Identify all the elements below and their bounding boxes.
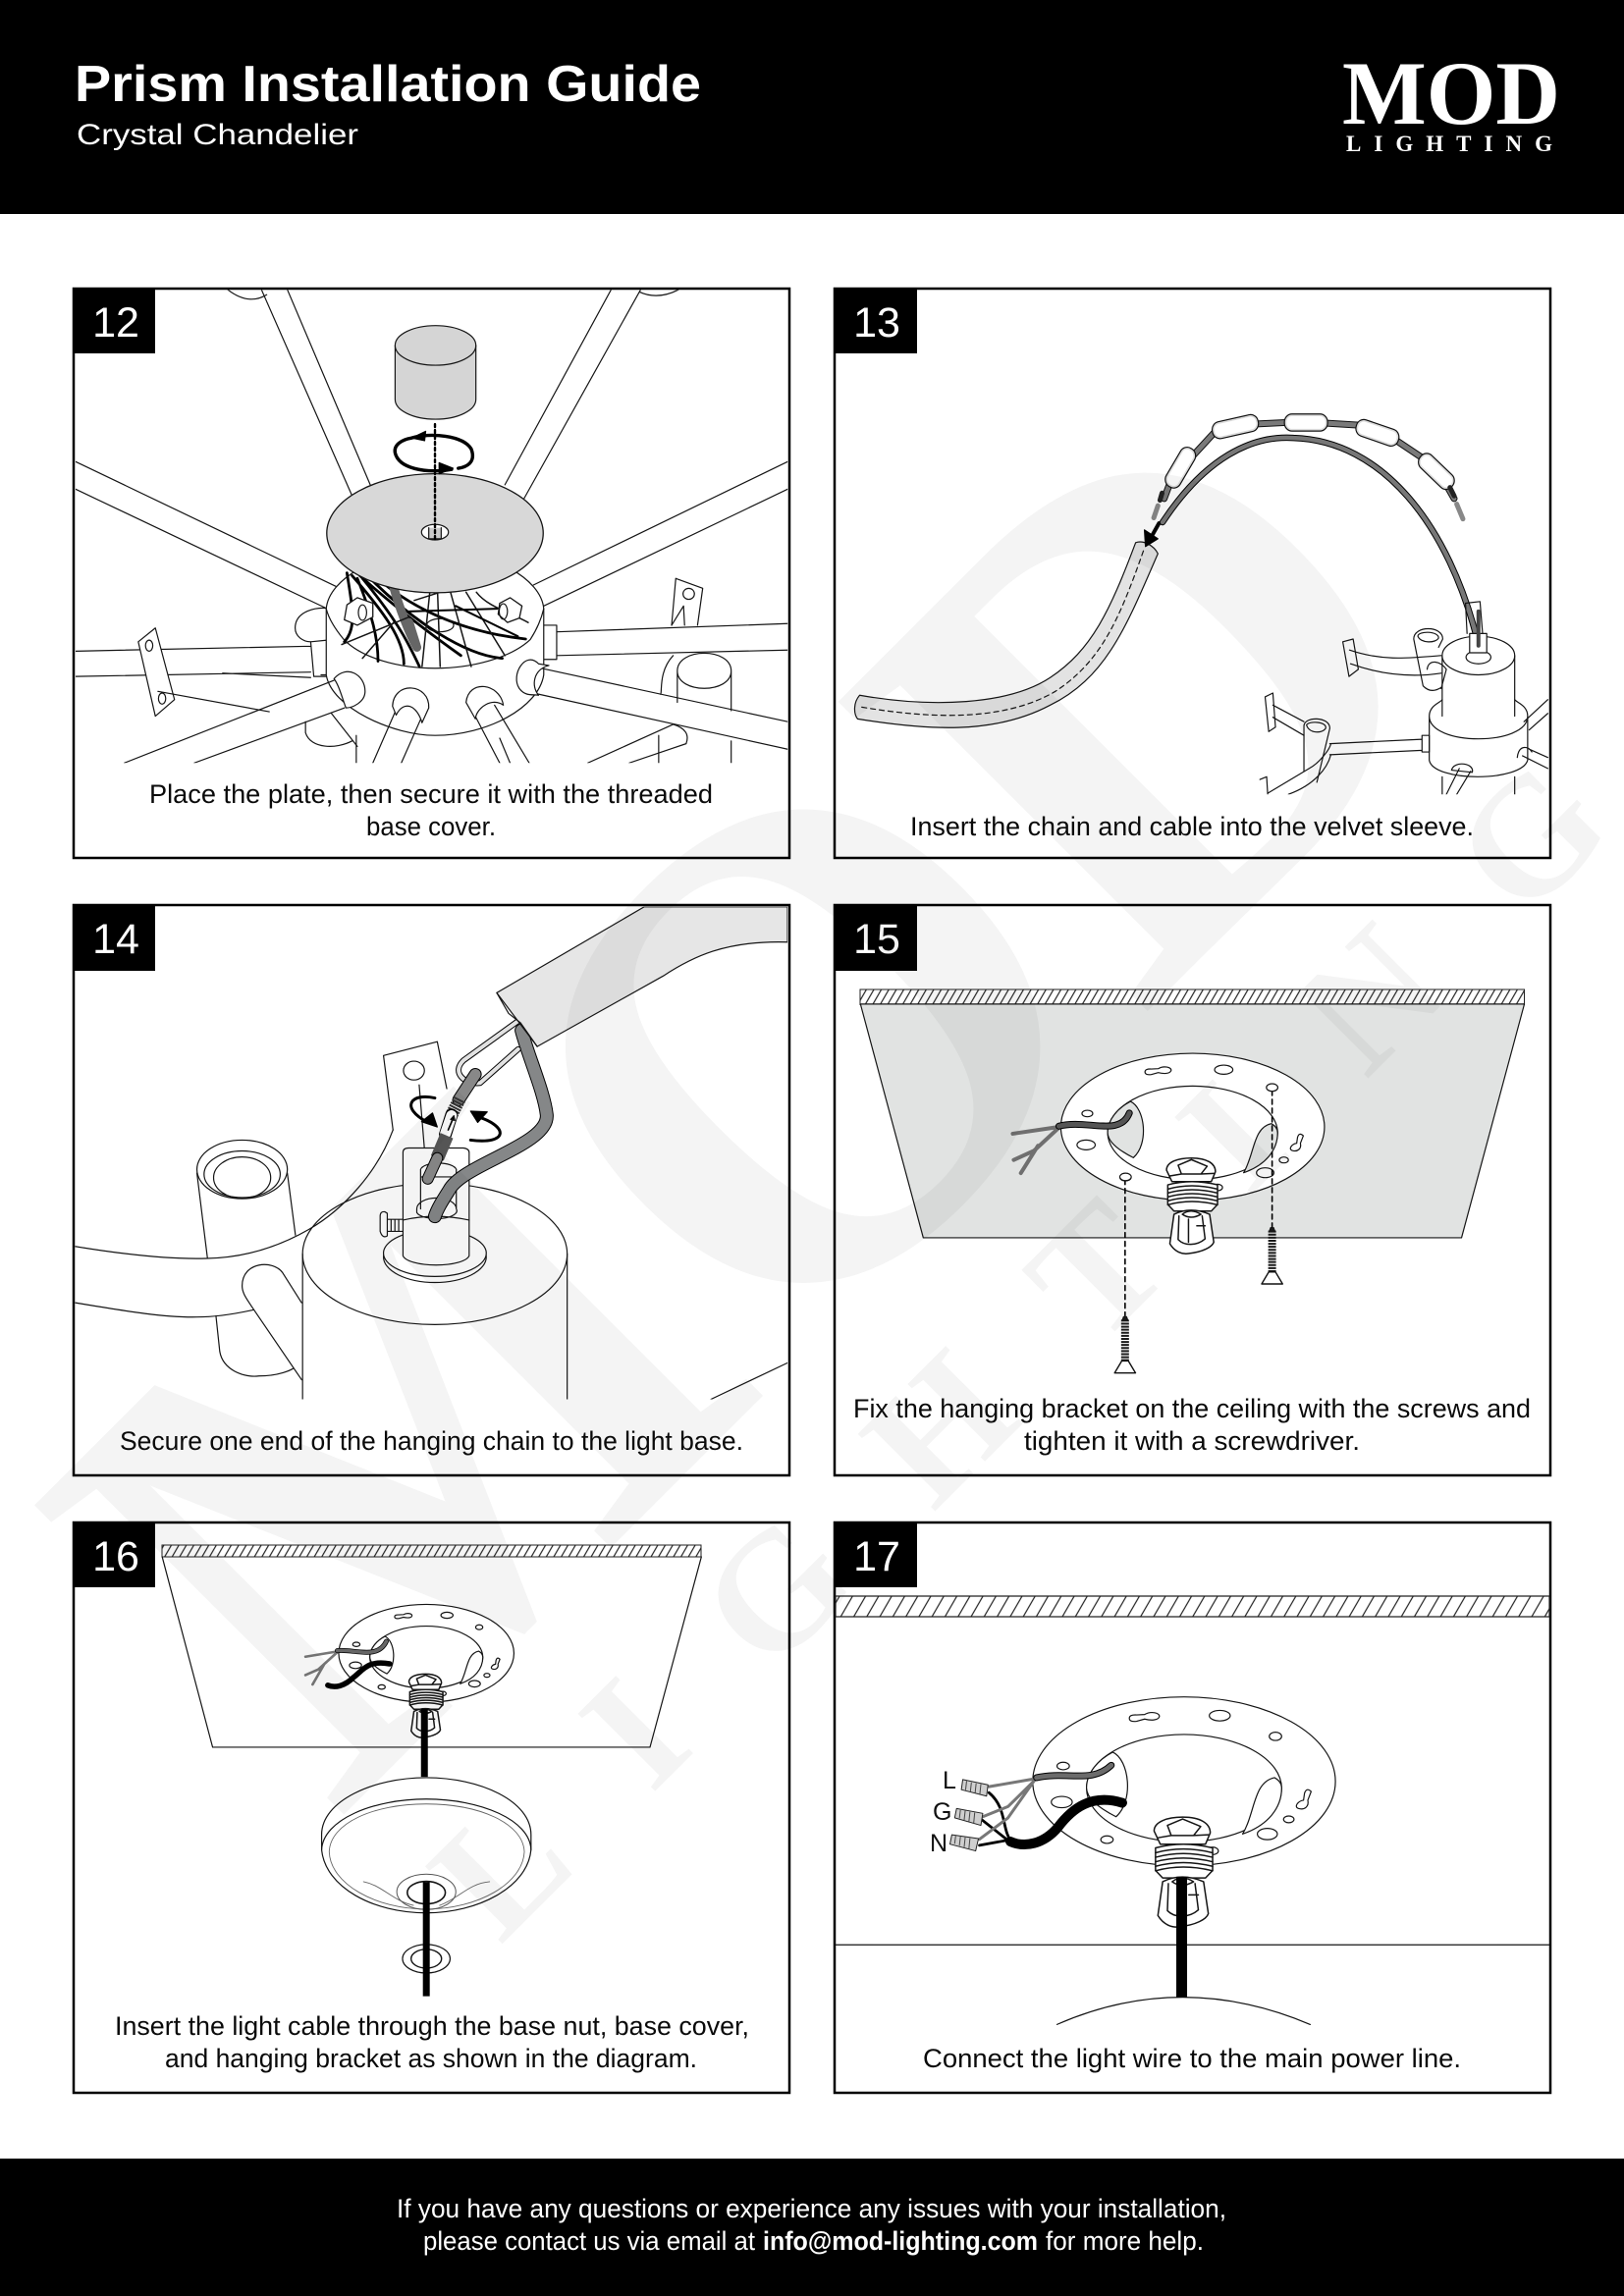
footer line 2 — [423, 2226, 1204, 2256]
step number: 14 — [92, 916, 139, 963]
caption: Connect the light wire to the main power line. — [923, 2044, 1461, 2073]
caption: Secure one end of the hanging chain to the light base. — [120, 1426, 743, 1456]
caption: and hanging bracket as shown in the diagram. — [165, 2044, 697, 2073]
panel: step 17 — [835, 1522, 1550, 2093]
footer line 1: If you have any questions or experience any issues with your installation, — [397, 2194, 1226, 2223]
step number: 16 — [92, 1533, 139, 1580]
flange — [383, 1255, 487, 1284]
step number: 13 — [853, 299, 900, 347]
cable — [1163, 438, 1479, 645]
step number — [73, 904, 155, 971]
light base cylinder — [302, 1254, 568, 1399]
footer line 2: for more help. — [1046, 2226, 1204, 2256]
caption: base cover. — [366, 812, 496, 841]
washer — [403, 1945, 450, 1973]
pipe column — [197, 1173, 296, 1376]
step number — [835, 904, 917, 971]
chain links — [1164, 415, 1455, 491]
arrow into sleeve — [1151, 523, 1159, 537]
light cable — [1176, 1877, 1187, 1997]
step number — [73, 1522, 155, 1587]
step number — [835, 288, 917, 353]
gray wires — [980, 1779, 1037, 1840]
watermark logo: LIGHTING — [395, 725, 1624, 1972]
collar — [403, 1148, 469, 1265]
main black wire — [1010, 1800, 1122, 1844]
footer banner — [0, 2159, 1624, 2296]
bracket tab — [384, 1041, 447, 1148]
illustration: chain and cable into sleeve — [854, 415, 1547, 794]
panel: step 12 — [73, 288, 789, 858]
caption — [853, 1394, 1531, 1456]
wires — [1012, 1127, 1058, 1173]
caption: Insert the light cable through the base nut, base cover, — [115, 2011, 749, 2041]
logo: LIGHTING — [1346, 132, 1552, 156]
wiring inside hub — [342, 573, 528, 667]
ceiling hatch — [836, 1596, 1549, 1617]
caption: tighten it with a screwdriver. — [1024, 1426, 1360, 1456]
caption: Fix the hanging bracket on the ceiling with the screws and — [853, 1394, 1531, 1423]
arm — [75, 1130, 393, 1258]
sleeve — [497, 907, 787, 1046]
footer line 2: please contact us via email at — [423, 2226, 755, 2256]
step number — [73, 288, 155, 353]
wire label N: N — [930, 1830, 947, 1857]
threaded cover — [395, 326, 476, 419]
screws — [1114, 1316, 1136, 1373]
plate — [327, 474, 543, 593]
rotation arrow — [395, 435, 472, 471]
wire nuts — [949, 1780, 988, 1851]
illustration: plate and threaded base cover on hub — [76, 290, 787, 763]
caption — [115, 2011, 749, 2073]
chain rods — [1164, 422, 1454, 499]
header banner — [0, 0, 1624, 214]
thin black wires — [980, 1792, 1012, 1845]
caption: Place the plate, then secure it with the threaded — [149, 779, 713, 809]
caption — [149, 779, 713, 841]
subtitle: Crystal Chandelier — [77, 119, 358, 151]
step number — [835, 1522, 917, 1587]
cable into collar — [435, 1031, 547, 1216]
caption: Insert the chain and cable into the velvet sleeve. — [910, 812, 1474, 841]
rotation arrows — [411, 1096, 435, 1122]
turnbuckle — [459, 1074, 475, 1099]
panel: step 15 — [835, 904, 1550, 1475]
footer line 2: info@mod-lighting.com — [763, 2226, 1038, 2256]
wire label G: G — [933, 1798, 951, 1826]
panel: step 16 — [73, 1522, 789, 2093]
illustration: cable through base cover — [162, 1557, 701, 1997]
chandelier base — [1343, 639, 1358, 676]
panel: step 14 — [73, 904, 789, 1475]
illustration: chain secured to light base — [75, 907, 787, 1399]
base cover — [322, 1778, 531, 1913]
step number: 15 — [853, 916, 900, 963]
cable bottom — [423, 1882, 430, 1997]
panel: step 13 — [835, 288, 1550, 858]
screw paths — [1125, 1091, 1272, 1316]
step number: 12 — [92, 299, 139, 347]
illustration: connecting wires — [836, 1697, 1549, 2024]
title: Prism Installation Guide — [75, 56, 701, 113]
hub body — [326, 572, 544, 736]
step number: 17 — [853, 1533, 900, 1580]
logo: MOD — [1342, 43, 1560, 143]
ceiling hatch — [860, 989, 1524, 1005]
chain end fittings — [1154, 504, 1463, 519]
chain link — [459, 1021, 518, 1083]
velvet sleeve — [854, 542, 1158, 727]
ceiling hatch — [162, 1545, 701, 1557]
illustration: bracket fixed to ceiling — [860, 1004, 1525, 1373]
set screw — [380, 1211, 403, 1237]
dotted axis — [434, 424, 436, 540]
wire label L: L — [943, 1767, 956, 1794]
cable top — [421, 1709, 428, 1777]
